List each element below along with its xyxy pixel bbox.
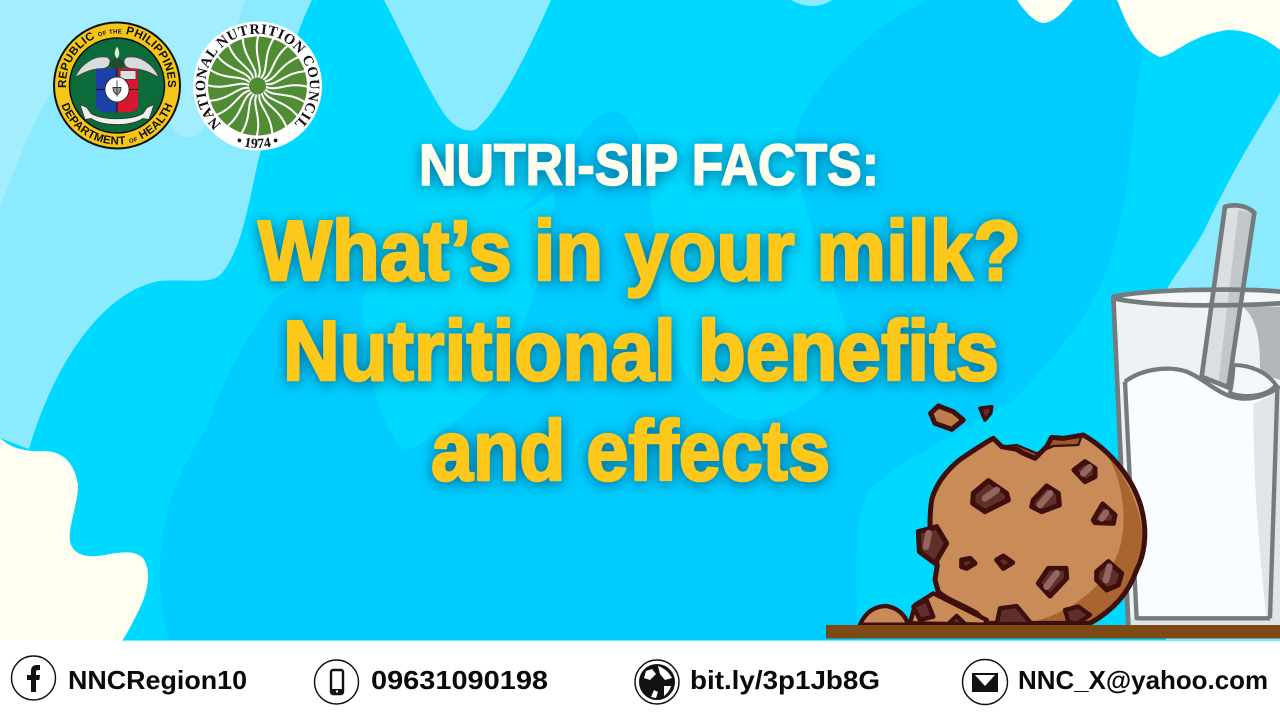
table edge xyxy=(826,625,1280,638)
logo: Department of Health seal xyxy=(53,22,181,150)
footer: website contact: bit.ly/3p1Jb8G xyxy=(690,665,880,695)
footer: email contact xyxy=(962,660,1268,704)
footer: Facebook contact: NNCRegion10 xyxy=(68,665,247,695)
footer: website contact xyxy=(635,660,880,704)
illustration: flying cookie crumbs xyxy=(931,406,992,429)
illustration: bitten chocolate chip cookie xyxy=(860,435,1145,625)
logo: Department of Health seal: DEPARTMENT OF HEALTH xyxy=(62,102,172,144)
footer: phone contact: 09631090198 xyxy=(371,665,548,695)
logo: National Nutrition Council seal: • 1974 • xyxy=(238,138,278,148)
heading: and effects: and effects xyxy=(431,404,830,499)
footer: email contact: NNC_X@yahoo.com xyxy=(1018,665,1268,695)
logo: Department of Health seal: REPUBLIC OF THE PHILIPPINES xyxy=(58,26,176,88)
footer: Facebook contact xyxy=(12,656,247,700)
illustration: glass of milk with straw xyxy=(1113,205,1280,627)
title: Nutri-Sip Facts: NUTRI-SIP FACTS: xyxy=(419,133,879,198)
heading: What's in your milk?: What’s in your milk? xyxy=(258,204,1021,299)
footer bar xyxy=(0,640,1280,720)
heading: Nutritional benefits: Nutritional benefits xyxy=(283,304,999,399)
logo: National Nutrition Council seal: NATIONAL NUTRITION COUNCIL xyxy=(196,24,320,130)
footer: phone contact xyxy=(314,660,548,704)
